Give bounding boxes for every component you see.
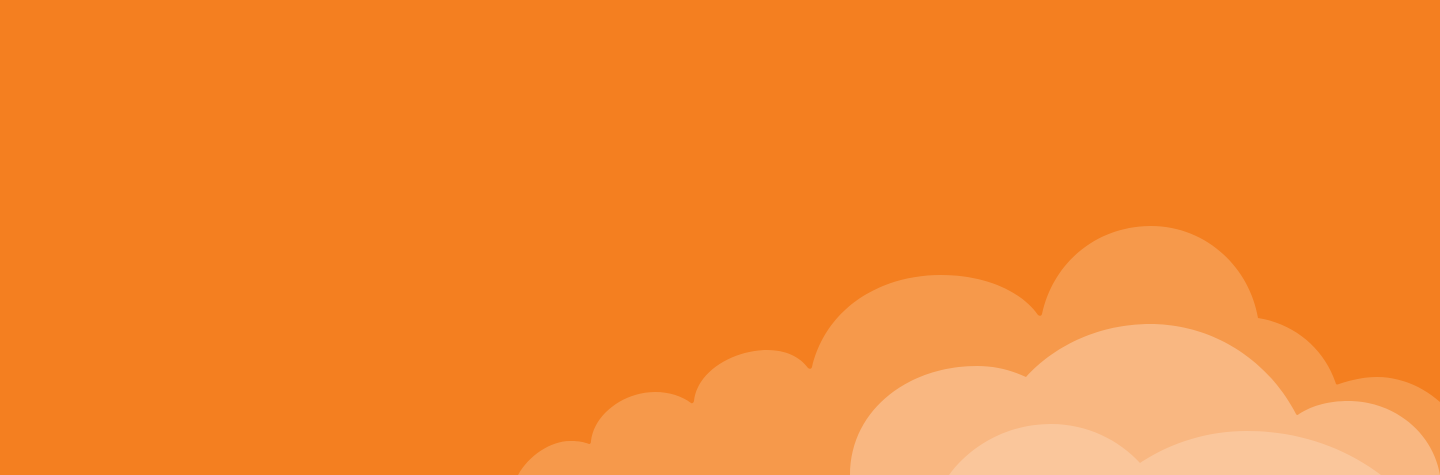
- cloud: front layer: [949, 424, 1381, 475]
- cloud: back layer: [518, 226, 1440, 475]
- cloud: middle layer: [850, 324, 1440, 475]
